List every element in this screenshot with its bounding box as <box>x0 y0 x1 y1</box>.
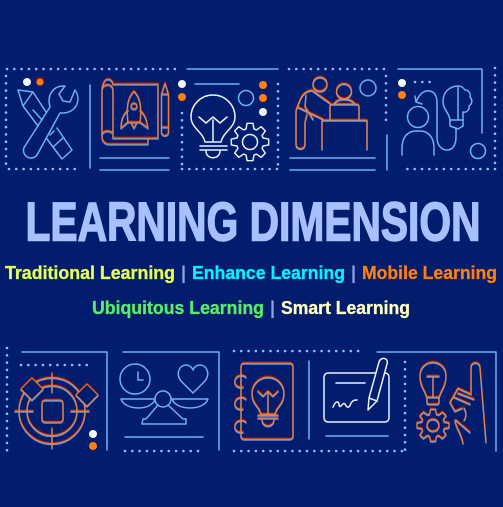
icon: person with bulb <box>402 86 472 155</box>
icon: scroll, rocket and pencil <box>102 78 168 145</box>
dimensions line one: Enhance Learning <box>192 263 345 283</box>
dimensions line one: Traditional Learning <box>5 263 175 283</box>
panel: smart learning icon <box>234 352 496 451</box>
dimensions line one: | <box>351 263 356 283</box>
panel: tools icon <box>6 69 175 169</box>
panel: collaborating people icon <box>289 69 387 170</box>
icon: target <box>15 372 98 449</box>
panel: target icon <box>7 348 107 452</box>
panel: blueprint rocket icon <box>100 78 169 170</box>
panel: signature card icon <box>324 358 389 436</box>
panel: notebook idea icon <box>234 351 360 440</box>
panel: idea and gear icon <box>178 69 278 169</box>
dimensions line two: Smart Learning <box>281 298 410 318</box>
icon: bulb, gear and pointing hand <box>417 361 486 444</box>
panel: balance scale icon <box>120 352 219 451</box>
icon: notebook with bulb <box>235 362 293 440</box>
dimensions line two <box>92 298 410 318</box>
dimensions line one: Mobile Learning <box>362 263 497 283</box>
icon: gear <box>231 123 269 161</box>
dimensions line one: | <box>181 263 186 283</box>
dimensions line one <box>5 263 497 283</box>
panel: thinking head icon <box>398 68 495 169</box>
icon: light bulb <box>191 95 235 158</box>
icon: scale with clock and heart <box>120 364 208 424</box>
icon: card with signature and pen <box>324 358 389 422</box>
icon: pencil and wrench <box>18 86 78 159</box>
dimensions line two: | <box>270 298 275 318</box>
dimensions line two: Ubiquitous Learning <box>92 298 264 318</box>
icon: people at desk <box>296 76 367 150</box>
